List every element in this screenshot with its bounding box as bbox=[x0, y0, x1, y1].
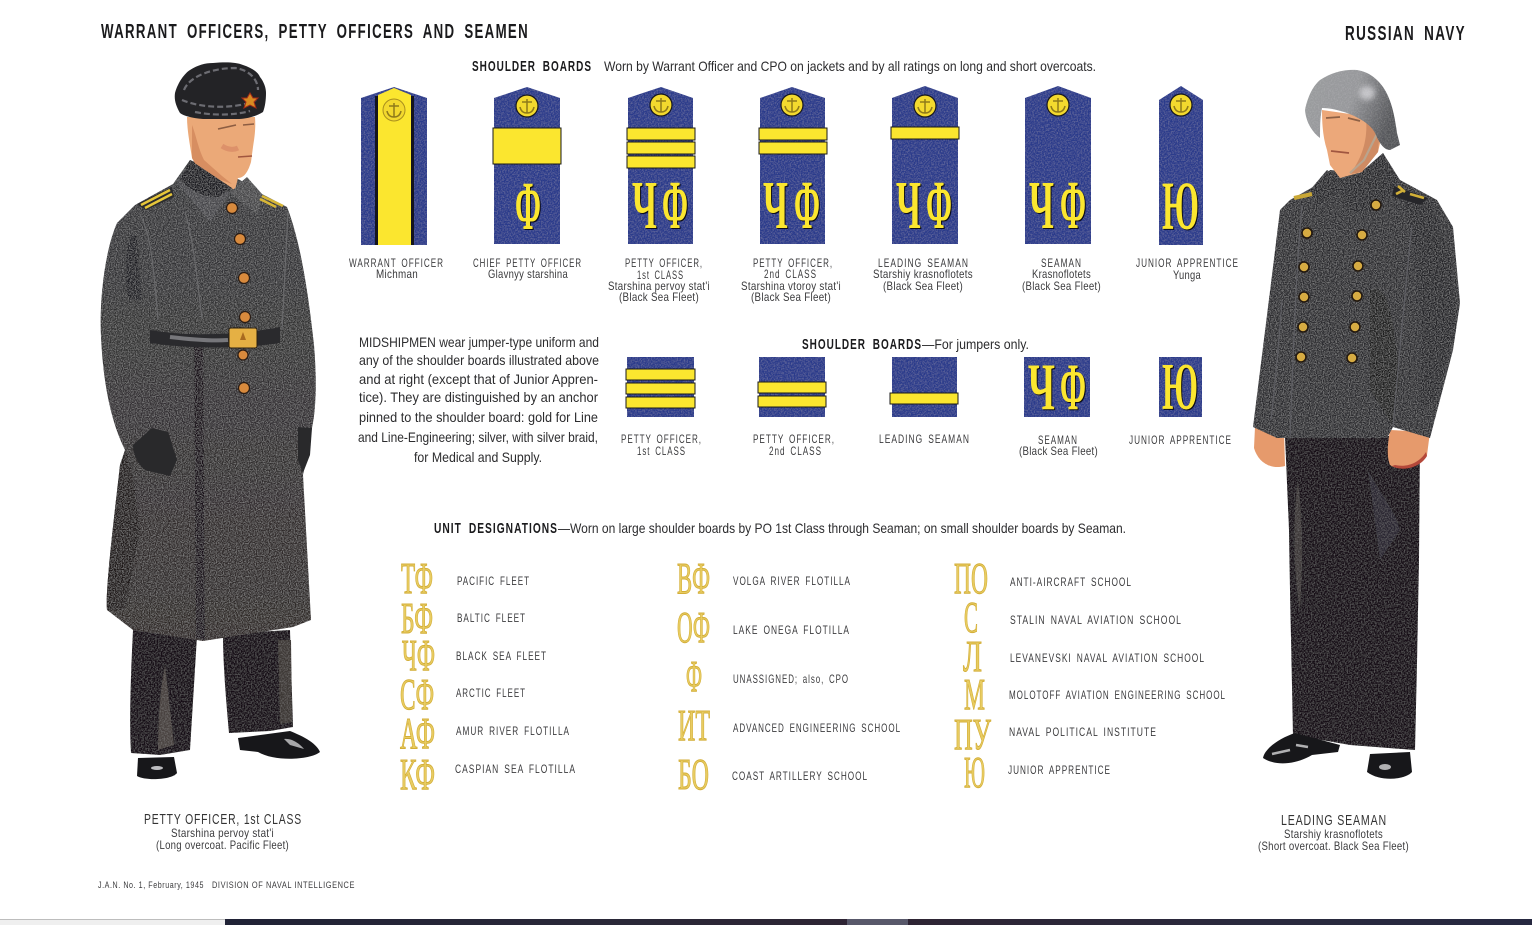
caption: petty officer: (Long overcoat. Pacific Fleet) bbox=[156, 838, 289, 852]
jumper board: seaman: Ч bbox=[1028, 350, 1055, 424]
board: petty officer 1st class: (Black Sea Fleet) bbox=[619, 290, 699, 304]
panel: unit designations column 2: ВФ bbox=[677, 554, 710, 603]
jumper board: leading seaman bbox=[879, 357, 970, 446]
shoulder board stripes: right bbox=[260, 196, 283, 207]
board: warrant officer bbox=[349, 87, 444, 281]
panel: unit designations column 3: MOLOTOFF AVIATION ENGINEERING SCHOOL bbox=[1009, 688, 1226, 702]
board: seaman: (Black Sea Fleet) bbox=[1022, 279, 1101, 293]
board: leading seaman: (Black Sea Fleet) bbox=[883, 279, 963, 293]
panel: unit designations column 3: ПО bbox=[954, 554, 988, 603]
board: junior apprentice: Yunga bbox=[1173, 268, 1201, 282]
panel: unit designations column 2 bbox=[677, 554, 901, 799]
belt bbox=[150, 327, 280, 348]
board: warrant officer: WARRANT OFFICER bbox=[349, 256, 444, 270]
board: petty officer 1st class: PETTY OFFICER, bbox=[625, 256, 703, 270]
panel: unit designations column 1: АФ bbox=[400, 709, 435, 758]
jumper board: petty officer 1st class bbox=[621, 357, 702, 458]
footer credit: J.A.N. No. 1, February, 1945 bbox=[98, 880, 204, 890]
text block: midshipmen: for Medical and Supply. bbox=[414, 449, 542, 465]
panel: unit designations column 2: UNASSIGNED; also, CPO bbox=[733, 672, 849, 686]
panel: unit designations column 3: ANTI-AIRCRAFT SCHOOL bbox=[1010, 575, 1132, 589]
overcoat bbox=[101, 160, 316, 641]
board: leading seaman bbox=[873, 86, 973, 293]
panel: unit designations column 2: VOLGA RIVER FLOTILLA bbox=[733, 574, 851, 588]
board: petty officer 2nd class bbox=[741, 87, 841, 304]
text block: midshipmen: and Line-Engineering; silver, with silver braid, bbox=[358, 429, 598, 445]
board: petty officer 1st class bbox=[608, 87, 710, 304]
title: WARRANT OFFICERS, PETTY OFFICERS AND SEAMEN bbox=[101, 21, 529, 43]
heading: Russian Navy: RUSSIAN NAVY bbox=[1345, 23, 1466, 45]
panel: unit designations column 2: ОФ bbox=[677, 603, 710, 652]
panel: unit designations column 1: AMUR RIVER FLOTILLA bbox=[456, 724, 570, 738]
footer credit bbox=[98, 880, 355, 890]
panel: small jumper shoulder boards bbox=[621, 350, 1232, 458]
board: leading seaman: Ч bbox=[896, 167, 921, 243]
panel: unit designations column 3: М bbox=[964, 670, 985, 719]
caption: leading seaman bbox=[1258, 812, 1409, 853]
panel: unit designations column 1: ЧФ bbox=[402, 631, 435, 680]
caption: leading seaman: Starshiy krasnoflotets bbox=[1284, 827, 1383, 841]
figure: petty officer 1st class in long overcoat bbox=[101, 62, 320, 779]
panel: unit designations column 2: БО bbox=[678, 750, 709, 799]
panel: unit designations column 2: LAKE ONEGA FLOTILLA bbox=[733, 623, 850, 637]
belt buckle bbox=[229, 328, 257, 348]
board: chief petty officer bbox=[473, 87, 582, 281]
board: chief petty officer: CHIEF PETTY OFFICER bbox=[473, 256, 582, 270]
panel: unit designations column 1: ARCTIC FLEET bbox=[456, 686, 526, 700]
heading: unit designations: —Worn on large shoulder boards by PO 1st Class through Seaman; on small shoulder boards by Seaman. bbox=[558, 520, 1126, 536]
heading: unit designations bbox=[434, 520, 1126, 537]
board: petty officer 1st class: Starshina pervoy stat'i bbox=[608, 279, 710, 293]
panel: unit designations column 1: CASPIAN SEA FLOTILLA bbox=[455, 762, 576, 776]
jumper board: junior apprentice bbox=[1129, 350, 1232, 447]
board: petty officer 1st class: Ф bbox=[662, 167, 688, 243]
trousers bbox=[130, 630, 293, 755]
heading: shoulder boards: Worn by Warrant Officer and CPO on jackets and by all ratings on long and short overcoats. bbox=[604, 58, 1096, 74]
short overcoat bbox=[1253, 153, 1460, 438]
board: petty officer 2nd class: 2nd CLASS bbox=[764, 267, 817, 281]
panel: unit designations column 3: Ю bbox=[964, 748, 985, 797]
board: petty officer 2nd class: Starshina vtoroy stat'i bbox=[741, 279, 841, 293]
board: petty officer 1st class: Ч bbox=[632, 167, 657, 243]
panel: unit designations column 2: Ф bbox=[686, 652, 702, 701]
board: junior apprentice: JUNIOR APPRENTICE bbox=[1136, 256, 1239, 270]
heading: unit designations: UNIT DESIGNATIONS bbox=[434, 520, 558, 537]
panel: unit designations column 1: BLACK SEA FLEET bbox=[456, 649, 547, 663]
panel: unit designations column 1: СФ bbox=[400, 670, 434, 719]
right glove bbox=[298, 427, 312, 473]
board: chief petty officer: Ф bbox=[515, 168, 541, 244]
heading: shoulder boards for jumpers: SHOULDER BOARDS bbox=[802, 336, 922, 353]
board: junior apprentice bbox=[1136, 86, 1239, 282]
board: petty officer 2nd class: PETTY OFFICER, bbox=[753, 256, 833, 270]
panel: unit designations column 1: BALTIC FLEET bbox=[457, 611, 526, 625]
text block: midshipmen: any of the shoulder boards illustrated above bbox=[359, 352, 599, 368]
jumper board: seaman: Ф bbox=[1060, 350, 1086, 424]
text block: midshipmen: pinned to the shoulder board: gold for Line bbox=[359, 409, 598, 425]
board: seaman: Ф bbox=[1060, 167, 1086, 243]
fur cap bbox=[175, 62, 266, 119]
coat seams bbox=[140, 212, 288, 330]
jumper board: petty officer 1st class: 1st CLASS bbox=[637, 444, 686, 458]
panel: unit designations column 2: ADVANCED ENGINEERING SCHOOL bbox=[733, 721, 901, 735]
shoulder board stripes: right bbox=[1392, 186, 1428, 205]
heading: shoulder boards bbox=[472, 58, 1096, 75]
hands bbox=[1254, 427, 1430, 469]
coat seams bbox=[1271, 205, 1412, 438]
caption: leading seaman: LEADING SEAMAN bbox=[1281, 812, 1387, 829]
board: leading seaman: Ф bbox=[926, 167, 952, 243]
panel: unit designations column 3: Л bbox=[963, 632, 982, 681]
figure: leading seaman in short overcoat bbox=[1253, 70, 1460, 779]
panel: unit designations column 1 bbox=[400, 554, 576, 799]
board: warrant officer: Michman bbox=[376, 267, 418, 281]
neck and face bbox=[1322, 110, 1382, 178]
steel helmet bbox=[1305, 70, 1400, 150]
shoulder board stripes: left bbox=[1294, 194, 1312, 198]
jumper board: junior apprentice: Ю bbox=[1162, 350, 1198, 424]
caption: petty officer bbox=[144, 811, 302, 852]
collar bbox=[177, 160, 262, 222]
caption: petty officer: PETTY OFFICER, 1st CLASS bbox=[144, 811, 302, 828]
board: petty officer 2nd class: (Black Sea Fleet) bbox=[751, 290, 831, 304]
left glove bbox=[133, 428, 177, 476]
panel: unit designations column 3: STALIN NAVAL AVIATION SCHOOL bbox=[1010, 613, 1182, 627]
text block: midshipmen bbox=[358, 334, 599, 465]
board: leading seaman: Starshiy krasnoflotets bbox=[873, 267, 973, 281]
board: chief petty officer: Glavnyy starshina bbox=[488, 267, 568, 281]
panel: unit designations column 1: БФ bbox=[401, 594, 433, 643]
coat buttons bbox=[1296, 200, 1381, 363]
jumper board: junior apprentice: JUNIOR APPRENTICE bbox=[1129, 433, 1232, 447]
jumper board: seaman bbox=[1019, 350, 1098, 458]
collar bbox=[1310, 153, 1398, 212]
panel: unit designations column 3: NAVAL POLITICAL INSTITUTE bbox=[1009, 725, 1157, 739]
caption: leading seaman: (Short overcoat. Black Sea Fleet) bbox=[1258, 839, 1409, 853]
board: seaman bbox=[1022, 86, 1101, 293]
caption: petty officer: Starshina pervoy stat'i bbox=[171, 826, 274, 840]
jumper board: petty officer 1st class: PETTY OFFICER, bbox=[621, 432, 702, 446]
panel: unit designations column 2: ИТ bbox=[678, 701, 710, 750]
panel: unit designations column 1: ТФ bbox=[401, 554, 433, 603]
panel: unit designations column 1: PACIFIC FLEET bbox=[457, 574, 530, 588]
panel: unit designations column 3 bbox=[954, 554, 1226, 797]
board: seaman: Krasnoflotets bbox=[1032, 267, 1091, 281]
right shoe bbox=[1367, 752, 1412, 779]
footer credit: DIVISION OF NAVAL INTELLIGENCE bbox=[212, 880, 355, 890]
board: petty officer 2nd class: Ч bbox=[763, 167, 788, 243]
text block: midshipmen: MIDSHIPMEN wear jumper-type uniform and bbox=[359, 334, 599, 350]
shoulder board stripes: left bbox=[137, 187, 174, 210]
board: petty officer 2nd class: Ф bbox=[794, 167, 820, 243]
board: leading seaman: LEADING SEAMAN bbox=[878, 256, 969, 270]
shoes bbox=[137, 731, 320, 779]
face bbox=[187, 117, 255, 190]
jumper board: seaman: (Black Sea Fleet) bbox=[1019, 444, 1098, 458]
trousers bbox=[1285, 436, 1420, 750]
jumper board: leading seaman: LEADING SEAMAN bbox=[879, 432, 970, 446]
panel: unit designations column 1: КФ bbox=[400, 750, 435, 799]
heading: shoulder boards for jumpers: —For jumpers only. bbox=[922, 336, 1029, 352]
cap star bbox=[242, 93, 258, 108]
text block: midshipmen: and at right (except that of Junior Appren- bbox=[359, 371, 598, 387]
jumper board: petty officer 2nd class: 2nd CLASS bbox=[769, 444, 822, 458]
panel: unit designations column 2: COAST ARTILLERY SCHOOL bbox=[732, 769, 868, 783]
bottom strip bbox=[0, 919, 1532, 925]
heading: shoulder boards: SHOULDER BOARDS bbox=[472, 58, 592, 75]
panel: unit designations column 3: JUNIOR APPRENTICE bbox=[1008, 763, 1111, 777]
board: junior apprentice: Ю bbox=[1162, 168, 1199, 244]
jumper board: petty officer 2nd class: PETTY OFFICER, bbox=[753, 432, 835, 446]
coat buttons bbox=[226, 202, 250, 394]
left shoe bbox=[1263, 733, 1340, 763]
board: seaman: Ч bbox=[1029, 167, 1054, 243]
text block: midshipmen: tice). They are distinguished by an anchor bbox=[359, 389, 598, 405]
jumper board: petty officer 2nd class bbox=[753, 357, 835, 458]
board: petty officer 1st class: 1st CLASS bbox=[637, 268, 684, 282]
jumper board: seaman: SEAMAN bbox=[1038, 433, 1078, 447]
panel: unit designations column 3: С bbox=[964, 593, 978, 642]
board: seaman: SEAMAN bbox=[1041, 256, 1082, 270]
panel: unit designations column 3: ПУ bbox=[954, 710, 991, 759]
panel: unit designations column 3: LEVANEVSKI NAVAL AVIATION SCHOOL bbox=[1010, 651, 1205, 665]
panel: large shoulder boards bbox=[349, 86, 1239, 304]
